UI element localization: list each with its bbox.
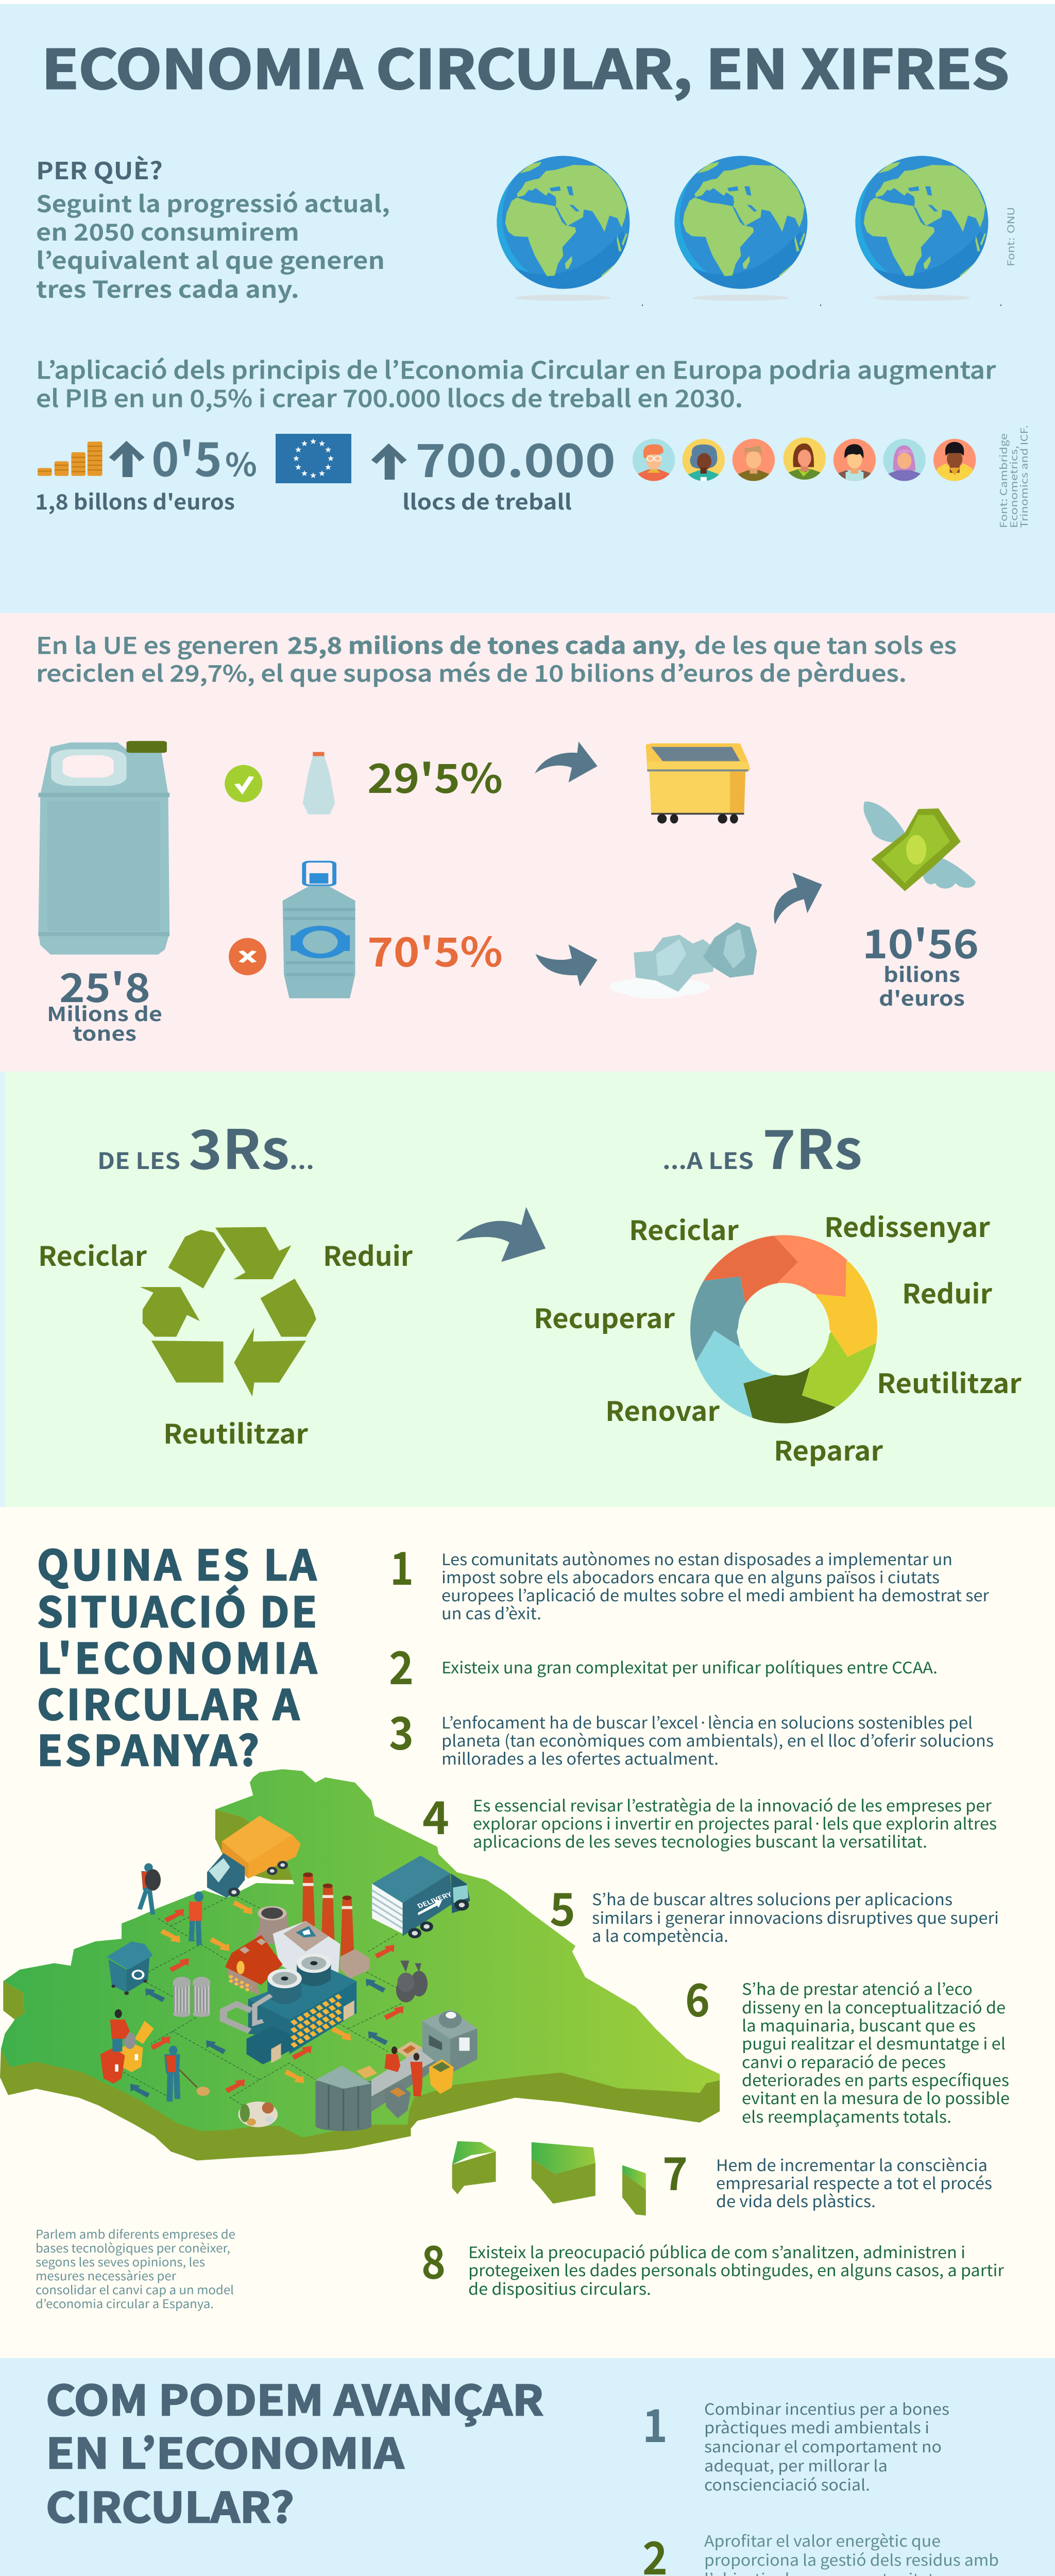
- text block: PIB: [36, 352, 996, 414]
- item 1 text: conscienciació social.: [704, 2472, 870, 2495]
- labels: 3Rs: Reciclar: [38, 1235, 147, 1274]
- item 6 text: evitant en la mesura de lo possible: [742, 2086, 1010, 2109]
- caption: billions: 1,8 billons d'euros: [35, 485, 235, 516]
- title: ECONOMIA CIRCULAR, EN XIFRES: [42, 26, 1009, 104]
- labels: 7Rs: Recuperar: [534, 1297, 675, 1336]
- item 8 text: Existeix la preocupació pública de com s’analitzen, administren i: [468, 2240, 965, 2263]
- item 1 text: adequat, per millorar la: [704, 2453, 888, 2476]
- heading: de les 3Rs: ...: [290, 1143, 314, 1176]
- item 7 number: 7: [662, 2138, 688, 2204]
- item 7 text: Hem de incrementar la consciència: [716, 2153, 988, 2176]
- item 6 text: [742, 1976, 1010, 2127]
- item 7 text: [716, 2153, 992, 2212]
- text block: intro: 25,8 milions de tones cada any,: [287, 628, 686, 660]
- footnote: d’economia circular a Espanya.: [36, 2294, 214, 2312]
- caption: milions de tones: Milions de: [47, 998, 162, 1027]
- item 6 text: S’ha de prestar atenció a l’eco: [742, 1976, 973, 1999]
- footnote: segons les seves opinions, les: [36, 2252, 205, 2270]
- icon: trash bags: [396, 1961, 428, 2003]
- icon: check: [225, 765, 262, 802]
- item 1 text: [704, 2397, 949, 2495]
- icon: cross: [229, 938, 266, 975]
- caption: bilions d'euros: [879, 959, 965, 1012]
- text block: PIB: el PIB en un 0,5% i crear 700.000 llocs de treball en 2030.: [36, 380, 743, 414]
- item 5 text: a la competència.: [592, 1923, 728, 1946]
- text block: intro: En la UE es generen: [36, 628, 279, 660]
- item 2 text: [704, 2529, 999, 2576]
- icons: seven people: [633, 437, 976, 481]
- heading: [46, 2368, 543, 2535]
- text block: intro: de les que tan sols es: [694, 628, 957, 660]
- item 2 number: 2: [389, 1632, 414, 1698]
- panel: situació a Espanya: [0, 1507, 1055, 2358]
- caption: milions de tones: tones: [73, 1018, 137, 1046]
- map of Spain with circular economy scene: [0, 1769, 720, 2161]
- icon: three earths: [497, 148, 1001, 306]
- panel: 3Rs to 7Rs: [0, 1072, 1055, 1507]
- labels: 7Rs: Reutilitzar: [877, 1362, 1022, 1401]
- item 1 text: [441, 1547, 990, 1624]
- item 5 text: similars i generar innovacions disruptives que superi: [592, 1905, 999, 1928]
- labels: 7Rs: Redissenyar: [824, 1206, 990, 1245]
- icon: large bottle: [283, 861, 355, 998]
- item 5 text: [592, 1887, 999, 1946]
- dashed routes: [123, 1896, 403, 2106]
- stat: 25'8: 25'8: [59, 957, 150, 1014]
- panel: com podem avançar: [0, 2358, 1055, 2576]
- labels: 7Rs: Reduir: [902, 1273, 992, 1311]
- item 3 number: 3: [389, 1698, 414, 1763]
- icon: sorting line: [315, 2009, 477, 2131]
- subheading: per què: PER QUÈ?: [36, 152, 163, 187]
- item 1 text: un cas d’èxit.: [441, 1601, 541, 1624]
- stat: 700.000: 700.000: [415, 424, 616, 490]
- text block: why: l’equivalent al que generen: [36, 242, 385, 276]
- item 6 text: pugui realitzar el desmuntatge i el: [742, 2031, 1006, 2054]
- item 8 text: de dispositius circulars.: [468, 2276, 651, 2299]
- caption: milions de tones: [47, 998, 162, 1046]
- heading: a les 7Rs: [662, 1107, 862, 1185]
- text block: why: [36, 185, 390, 304]
- stat: 0'5%: 0'5: [151, 422, 222, 490]
- panel: economia circular en xifres: [0, 4, 1055, 613]
- item 1 text: europees l’aplicació de multes sobre el medi ambient ha demostrat ser: [441, 1583, 990, 1606]
- item 3 text: millorades a les ofertes actualment.: [441, 1746, 719, 1769]
- item 6 text: els reemplaçaments totals.: [742, 2104, 951, 2127]
- item 4 text: [473, 1793, 997, 1852]
- small arrows: [150, 1909, 403, 2093]
- icon: factory pipes: [224, 1995, 271, 2031]
- heading: de les 3Rs: [97, 1107, 314, 1185]
- icon: workers: [110, 1863, 210, 2102]
- footnote: [36, 2225, 235, 2312]
- icon: garbage truck: [207, 1816, 301, 1898]
- panel background: [0, 2358, 1055, 2576]
- item 2 text: proporciona la gestió dels residus amb: [704, 2548, 999, 2570]
- item 8 number: 8: [421, 2227, 446, 2292]
- heading: CIRCULAR A: [37, 1672, 300, 1732]
- icon: plastic jug: [38, 741, 169, 955]
- icon: recycle symbol: [140, 1227, 316, 1397]
- item 1 text: Combinar incentius per a bones: [704, 2397, 949, 2419]
- caption: bilions d'euros: d'euros: [879, 983, 965, 1012]
- item 6 text: deteriorades en parts específiques: [742, 2067, 1009, 2091]
- item 1 number: 1: [390, 1533, 414, 1598]
- item 4 text: aplicacions de les seves tecnologies buscant la versatilitat.: [473, 1829, 927, 1852]
- stat: 10'56: 10'56: [862, 913, 979, 970]
- heading: SITUACIÓ DE: [37, 1580, 317, 1639]
- text block: intro: [36, 628, 957, 688]
- source note: ONU: Font: ONU: [1006, 207, 1017, 266]
- panel background: [0, 1072, 1055, 1507]
- icon: delivery truck: [372, 1856, 470, 1938]
- bay wall: [215, 1809, 296, 1880]
- icon: crushed bottles: [609, 922, 757, 999]
- source note: Cambridge: Font: Cambridge: [996, 433, 1010, 528]
- icon: flying money: [863, 802, 976, 891]
- labels: 7Rs: Renovar: [605, 1390, 720, 1429]
- footnote: consolidar el canvi cap a un model: [36, 2280, 234, 2298]
- heading: de les 3Rs: DE LES: [97, 1143, 180, 1176]
- item 8 text: protegeixen les dades personals obtingudes, en alguns casos, a partir: [468, 2258, 1005, 2281]
- map side walls: [0, 1981, 720, 2161]
- item 6 text: canvi o reparació de peces: [742, 2049, 946, 2073]
- footnote: mesures necessàries per: [36, 2266, 176, 2284]
- panel background: [0, 1507, 1055, 2358]
- icon: main factory: [246, 1954, 356, 2064]
- item 4 text: Es essencial revisar l’estratègia de la innovació de les empreses per: [473, 1793, 992, 1816]
- item 4 text: explorar opcions i invertir en projectes paral·lels que explorin altres: [473, 1811, 997, 1834]
- panel: plastic waste: [0, 613, 1055, 1072]
- panel background: [0, 4, 1055, 613]
- stat: 70'5%: 70'5%: [367, 921, 503, 978]
- item 6 text: la maquinaria, buscant que es: [742, 2013, 976, 2036]
- stat: 0'5%: [151, 422, 257, 490]
- heading: a les 7Rs: ...A LES: [662, 1143, 754, 1176]
- item 1 text: Les comunitats autònomes no estan disposades a implementar un: [441, 1547, 952, 1570]
- icon: coins: [38, 442, 103, 476]
- labels: 7Rs: Reparar: [774, 1430, 883, 1468]
- arrow: to money: [774, 873, 822, 924]
- heading: de les 3Rs: 3Rs: [189, 1107, 290, 1185]
- arrow: to waste: [536, 944, 598, 987]
- item 3 text: planeta (tan econòmiques com ambientals), en el lloc d’oferir solucions: [441, 1728, 994, 1751]
- heading: EN L’ECONOMIA: [46, 2421, 404, 2481]
- labels: 3Rs: Reduir: [323, 1235, 413, 1274]
- item 2 text: Aprofitar el valor energètic que: [704, 2529, 941, 2551]
- text block: why: Seguint la progressió actual,: [36, 185, 390, 219]
- Canary islands: [452, 2141, 646, 2215]
- icons: bottles, bin, arrows, money: [38, 741, 976, 999]
- text block: why: en 2050 consumirem: [36, 214, 299, 247]
- item 1 text: impost sobre els abocadors encara que en alguns països i ciutats: [441, 1565, 940, 1588]
- item 1 text: sancionar el comportament no: [704, 2434, 942, 2457]
- item 7 text: empresarial respecte a tot el procés: [716, 2171, 992, 2194]
- item 2 text: Existeix una gran complexitat per unificar polítiques entre CCAA.: [441, 1655, 938, 1678]
- caption: llocs de treball: llocs de treball: [402, 485, 572, 516]
- item 5 text: S’ha de buscar altres solucions per aplicacions: [592, 1887, 952, 1910]
- icon: small bottle: [303, 752, 335, 815]
- icon: grey building: [273, 1921, 370, 1980]
- icon: factory chimneys: [302, 1872, 354, 1958]
- item 6 number: 6: [685, 1964, 710, 2030]
- icon: cooling tower: [252, 1906, 296, 1944]
- heading: QUINA ES LA: [37, 1533, 317, 1592]
- item 1 text: pràctiques medi ambientals i: [704, 2415, 929, 2438]
- heading: L'ECONOMIA: [37, 1626, 317, 1686]
- arrow: to bin: [535, 741, 598, 783]
- icon: delivery truck: DELIVERY: [415, 1889, 454, 1910]
- heading: ESPANYA?: [37, 1718, 259, 1778]
- labels: 3Rs: [38, 1235, 413, 1451]
- labels: 7Rs: [534, 1206, 1022, 1468]
- item 8 text: [468, 2240, 1005, 2299]
- source note: Cambridge: [996, 425, 1031, 528]
- icon: red-roof building: [225, 1935, 283, 1995]
- icon: grey trash cans: [173, 1977, 210, 2017]
- item 5 number: 5: [550, 1874, 575, 1939]
- item 3 text: L’enfocament ha de buscar l’excel·lència en solucions sostenibles pel: [441, 1710, 973, 1733]
- icon: red and yellow bins: [100, 2021, 154, 2083]
- heading: CIRCULAR?: [46, 2475, 294, 2535]
- text block: intro: reciclen el 29,7%, el que suposa més de 10 bilions d’euros de pèrdues.: [36, 655, 907, 688]
- icon: yellow bin: [646, 743, 750, 823]
- arrow: 3Rs to 7Rs: [456, 1207, 546, 1262]
- icon: EU flag: [276, 434, 351, 483]
- item 3 text: [441, 1710, 994, 1769]
- item 6 text: disseny en la conceptualització de: [742, 1995, 1006, 2018]
- stat: 29'5%: 29'5%: [367, 747, 503, 805]
- labels: 3Rs: Reutilitzar: [163, 1413, 308, 1451]
- item 4 number: 4: [422, 1782, 449, 1848]
- heading: a les 7Rs: 7Rs: [762, 1107, 862, 1185]
- icon: arrow up: [109, 441, 145, 477]
- west cliff: [3, 1981, 25, 2020]
- heading: [37, 1533, 317, 1778]
- footnote: bases tecnològiques per conèixer,: [36, 2239, 230, 2256]
- caption: bilions d'euros: bilions: [883, 959, 960, 988]
- source note: Cambridge: Trinomics and ICF.: [1017, 425, 1031, 528]
- text block: PIB: L’aplicació dels principis de l’Economia Circular en Europa podria augmentar: [36, 352, 996, 386]
- heading: COM PODEM AVANÇAR: [46, 2368, 543, 2428]
- item 7 text: de vida dels plàstics.: [716, 2189, 876, 2212]
- map top surface: [1, 1769, 720, 2138]
- icon: trash pile: [239, 2102, 278, 2127]
- stat: 0'5%: %: [225, 439, 257, 485]
- source note: Cambridge: Econometrics,: [1007, 446, 1020, 528]
- item 1 number: 1: [642, 2390, 668, 2455]
- panel background: [0, 613, 1055, 1072]
- chart: 7Rs cycle: [690, 1235, 877, 1423]
- icon: arrow up 2: [371, 444, 407, 480]
- labels: 7Rs: Reciclar: [629, 1209, 739, 1248]
- footnote: Parlem amb diferents empreses de: [36, 2225, 235, 2242]
- text block: why: tres Terres cada any.: [36, 271, 299, 304]
- icon: blue container: [107, 1941, 153, 1995]
